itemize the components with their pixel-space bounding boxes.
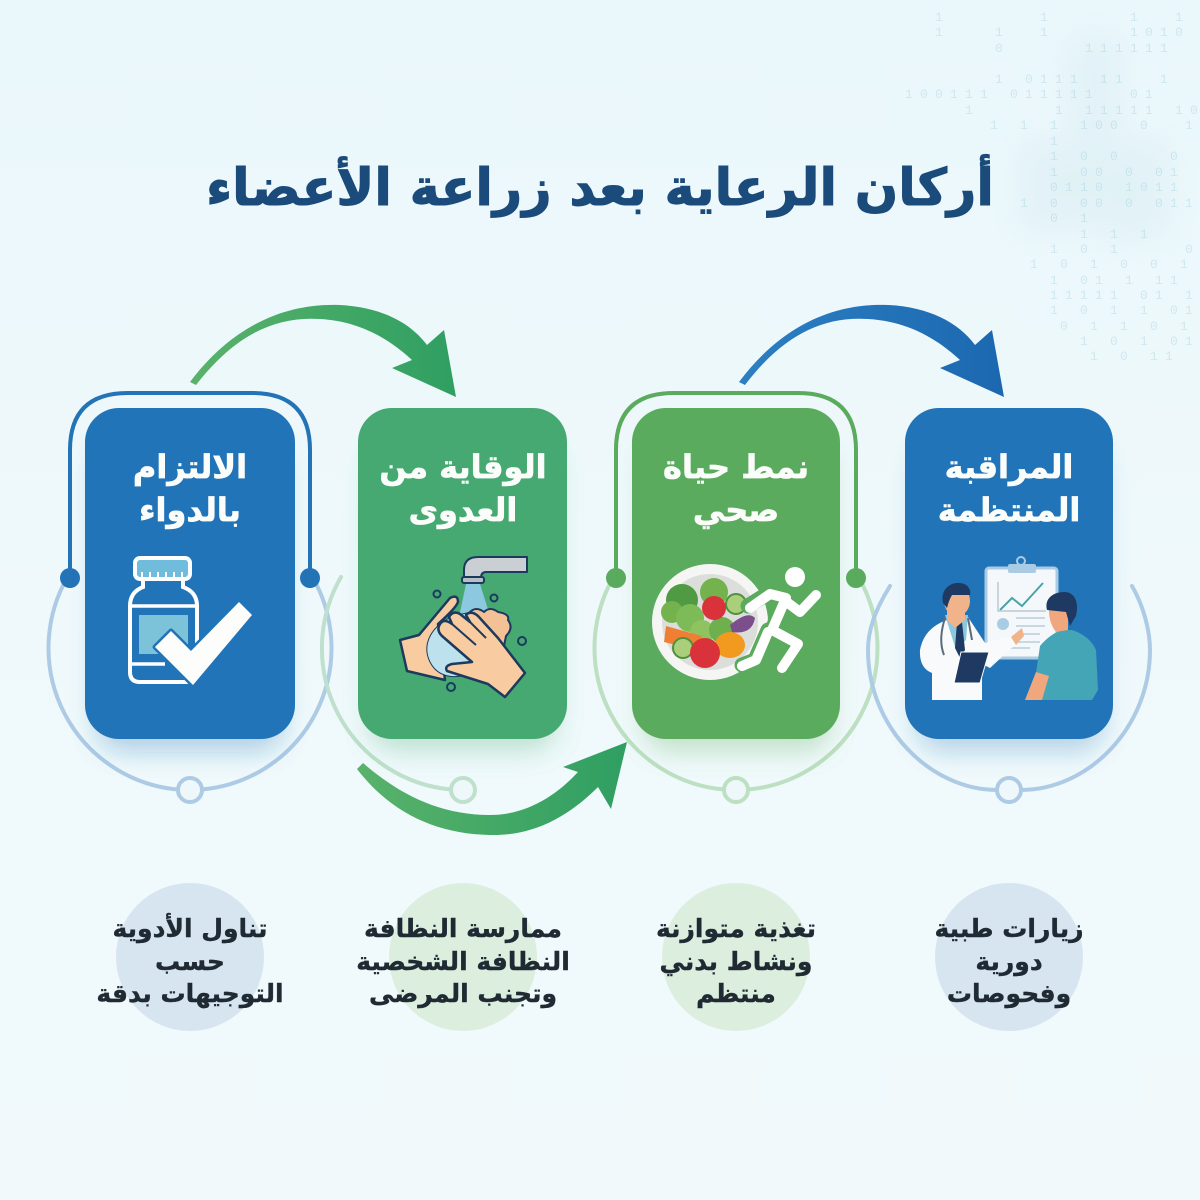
connector: ring for card 2 [322, 577, 475, 802]
heading: infection prevention: الوقاية من [379, 448, 547, 486]
text block: medication description: التوجيهات بدقة [96, 979, 284, 1009]
text block: monitoring description [934, 883, 1084, 1031]
panel: medication adherence [85, 408, 295, 739]
heading: regular monitoring: المراقبة [945, 448, 1073, 486]
text: 1 0 11 [1090, 349, 1180, 364]
text: 1 [1050, 134, 1065, 149]
panel: healthy lifestyle [632, 408, 840, 739]
heading: medication adherence [133, 448, 247, 529]
text block: lifestyle description: منتظم [696, 979, 776, 1008]
text block: medication description: تناول الأدوية [112, 913, 268, 944]
text: 1 0 1 0 [1050, 242, 1200, 257]
doctor [920, 617, 1016, 700]
text block: medication description: حسب [155, 947, 225, 976]
text block: prevention description: النظافة الشخصية [356, 947, 570, 976]
card shadows [95, 440, 1105, 752]
connector: ring and frame for card 1 [49, 393, 331, 802]
text block: monitoring description: زيارات طبية [934, 914, 1084, 943]
heading: regular monitoring [938, 448, 1080, 529]
icon: salad plate and runner [652, 564, 816, 680]
text: 1 0 1 01 [1080, 334, 1200, 349]
text block: prevention description: ممارسة النظافة [364, 914, 562, 943]
arrow: green bottom [357, 742, 627, 835]
text block: prevention description: وتجنب المرضى [369, 979, 557, 1009]
arrow: blue top [739, 305, 1004, 397]
panel: regular monitoring [905, 408, 1113, 739]
icon: doctor and patient with clipboard [920, 557, 1098, 700]
heading: healthy lifestyle: نمط حياة [663, 448, 809, 486]
text block: lifestyle description: تغذية متوازنة [656, 914, 816, 944]
text block: monitoring description: وفحوصات [947, 979, 1071, 1009]
text block: monitoring description: دورية [975, 947, 1043, 977]
patient [1025, 630, 1098, 700]
text block: medication description [96, 883, 284, 1031]
heading: healthy lifestyle [663, 448, 809, 529]
icon: washing hands under faucet [400, 557, 527, 697]
text: 0 1 1 0 1 [1060, 319, 1195, 334]
title: أركان الرعاية بعد زراعة الأعضاء [206, 154, 994, 218]
heading: healthy lifestyle: صحي [693, 491, 779, 529]
text block: lifestyle description: ونشاط بدني [660, 947, 812, 977]
heading: infection prevention [379, 448, 547, 529]
runner figure [742, 592, 798, 670]
text block: lifestyle description [656, 883, 816, 1031]
connector: ring for card 4 [868, 586, 1150, 802]
panel: infection prevention [358, 408, 567, 739]
heading: infection prevention: العدوى [409, 491, 517, 529]
connector: ring and frame for card 3 [595, 393, 877, 802]
text: 1 1 1 [1080, 227, 1155, 242]
icon: medicine bottle with check [130, 558, 252, 685]
arrow: green top [190, 305, 456, 397]
text block: prevention description [356, 883, 570, 1031]
heading: regular monitoring: المنتظمة [938, 491, 1080, 529]
heading: medication adherence: بالدواء [139, 491, 241, 529]
heading: medication adherence: الالتزام [133, 448, 247, 486]
